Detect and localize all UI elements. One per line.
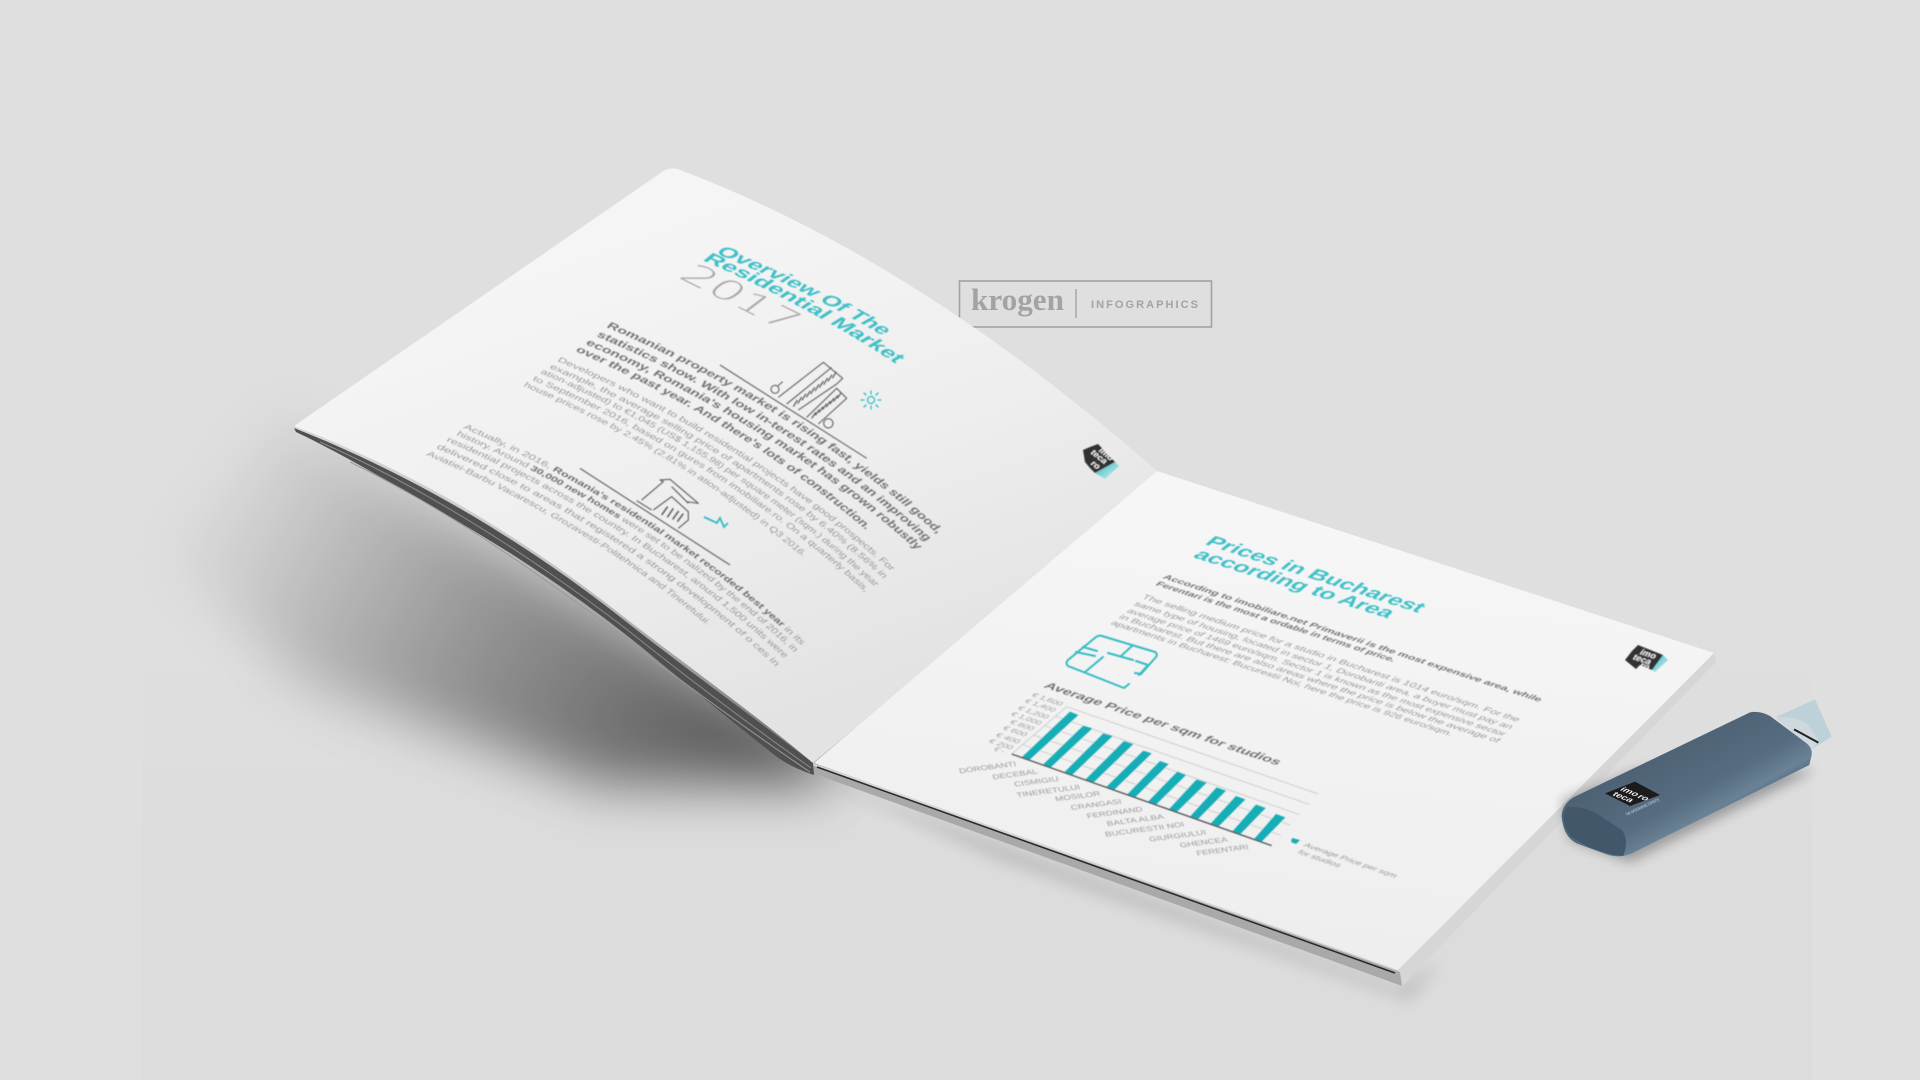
x axis labels: CRANGASI — [1070, 799, 1123, 812]
x axis labels: DOROBANTI — [958, 761, 1018, 775]
x axis labels: BUCURESTII NOI — [1104, 822, 1186, 839]
icon: zigzag — [704, 517, 728, 527]
body text — [1108, 593, 1524, 744]
logo: imoteca right page: ro — [1638, 661, 1653, 672]
intro text: According to imobiliare.net Primaverii is the most expensive area, while — [1160, 573, 1546, 703]
plot: grid, bars and axis — [1012, 707, 1318, 846]
panel: right page of the brochure — [812, 471, 1716, 986]
shadow under right page — [812, 775, 1440, 1000]
icon: apartment buildings — [720, 362, 867, 458]
krogen infographics logo — [960, 281, 1212, 327]
icon: sun — [861, 391, 881, 409]
y axis labels — [986, 691, 1066, 755]
icon: construction building — [580, 468, 730, 565]
heading: prices in bucharest — [1188, 534, 1431, 622]
intro text: statistics show. With low in-terest rates and an improving — [596, 332, 931, 542]
y axis labels: € 1,200 — [1015, 704, 1052, 720]
x axis labels: CISMIGIU — [1013, 776, 1060, 789]
body text: in Bucharest. But there are also areas where the price is below the average of — [1116, 613, 1504, 744]
logo: imoteca left page: ro — [1088, 459, 1104, 471]
y axis labels: € 200 — [986, 737, 1016, 751]
intro text: economy, Romania's housing market has grown robustly — [586, 340, 922, 549]
x axis labels: TINERETULUI — [1016, 784, 1081, 799]
left page content — [426, 246, 1120, 666]
heading: overview of the residential market: Overview Of The — [718, 246, 889, 335]
logo: imoteca right page: teca — [1631, 653, 1655, 666]
cutter logo: THE INFOGRAPHIC EXPERTS — [1625, 797, 1660, 817]
body text: The selling medium price for a studio in Bucharest is 1014 euro/sqm. For the — [1139, 593, 1524, 723]
heading: prices in bucharest: Prices in Bucharest — [1200, 534, 1431, 616]
logo: imoteca left page — [1083, 444, 1119, 479]
body text paragraph 1: example, the average selling price of apartments rose by 6.40% (8.56% in — [550, 365, 886, 578]
body text: apartments in Bucharest: Bucurestii Noi, here the price is 926 euro/sqm. — [1108, 619, 1456, 737]
right page content — [958, 534, 1668, 879]
body text paragraph 2: history. Around 30,000 new homes were set to be nalized by the end of 2016, in — [456, 430, 798, 652]
krogen infographics logo: INFOGRAPHICS — [1091, 299, 1198, 311]
krogen infographics logo: krogen — [971, 282, 1064, 317]
body text paragraph 2: Aviatiei-Barbu Vacarescu, Grozavesti-Politehnica and Tineretului. — [426, 452, 710, 625]
y axis labels: € 1,000 — [1008, 710, 1045, 726]
y axis labels: € 800 — [1007, 718, 1037, 732]
cutter body — [1562, 712, 1812, 856]
shadow under left page — [170, 410, 830, 785]
intro text — [1153, 573, 1546, 703]
x axis labels — [958, 761, 1250, 858]
page sheet — [814, 471, 1714, 970]
logo: imoteca right page — [1625, 645, 1668, 672]
body text: same type of housing, located in sector 1, Dorobanti area, a buyer must pay an — [1131, 600, 1517, 731]
cutter logo — [1605, 782, 1660, 817]
y axis labels: € 600 — [1000, 724, 1030, 738]
body text paragraph 1: ation-adjusted) to €1,045 (US$ 1,155.98) per square meter (sqm.) during the year — [540, 370, 878, 586]
x axis labels: DECEBAL — [992, 769, 1039, 781]
y axis labels: € 400 — [993, 731, 1023, 745]
chart legend: Average Price per sqm — [1301, 841, 1400, 879]
body text paragraph 2: Actually, in 2016, Romania's residential market recorded best year in its — [463, 424, 804, 645]
page stack edge — [294, 428, 814, 775]
body text paragraph 1: house prices rose by 2.45% (2.81% in ation-adjusted) in Q3 2016. — [524, 382, 805, 556]
cutter logo: teca — [1610, 791, 1637, 804]
logo: imoteca right page: imo — [1638, 648, 1659, 661]
chart legend — [1291, 838, 1400, 879]
x axis labels: FERDINAND — [1086, 806, 1144, 820]
cutter cap — [1564, 807, 1626, 856]
intro text: Ferentari is the most a ordable in terms of price. — [1153, 580, 1399, 663]
x axis labels: GHENCEA — [1179, 837, 1229, 850]
chart legend: for studios — [1295, 848, 1344, 869]
y axis labels: € 1,400 — [1022, 697, 1059, 713]
cutter blade — [1775, 699, 1832, 750]
x axis labels: GIURGIULUI — [1148, 830, 1208, 844]
heading: year 2017: 2017 — [670, 258, 811, 337]
x axis labels: FERENTARI — [1196, 844, 1250, 858]
chart title: Average Price per sqm for studios — [1041, 681, 1284, 767]
logo: imoteca left page: teca — [1088, 448, 1110, 465]
intro text: Romanian property market is rising fast, yields still good, — [606, 322, 942, 534]
page block edge — [812, 653, 1716, 986]
chart: average price per sqm for studios — [958, 681, 1400, 879]
body text paragraph 1: to September 2016, based on gures from imobiliare.ro. On a quarterly basis, — [532, 376, 866, 592]
y axis labels: € 1,600 — [1029, 691, 1066, 707]
cutter logo: imo — [1618, 786, 1642, 798]
body text: average price of 1469 euro/sqm. Sector 1 is known as the most expensive sector — [1124, 607, 1509, 738]
body text paragraph 2: residential projects across the country. In Bucharest, around 1,500 units were — [446, 438, 788, 658]
shadow under cutter — [1562, 770, 1815, 862]
x axis labels: BALTA ALBA — [1106, 814, 1166, 828]
cutter logo: ro — [1635, 793, 1652, 802]
logo: imoteca left page: imo — [1096, 446, 1117, 463]
x axis labels: MOSILOR — [1054, 791, 1102, 803]
intro text: over the past year. And there's lots of construction. — [576, 348, 868, 530]
body text paragraph 2: delivered close to areas that registered a strong development of o ces in — [436, 445, 779, 666]
y axis labels: € - — [991, 745, 1008, 755]
heading: overview of the residential market: Residential Market — [703, 252, 904, 364]
heading: prices in bucharest: according to Area — [1188, 547, 1400, 622]
utility cutter with logo — [1562, 699, 1832, 856]
icon: floor plan — [1066, 636, 1157, 688]
body text paragraph 1: Developers who want to build residential projects have good prospects. For — [558, 356, 895, 570]
page sheet — [294, 168, 1157, 763]
panel: left page of the brochure — [294, 168, 1156, 775]
